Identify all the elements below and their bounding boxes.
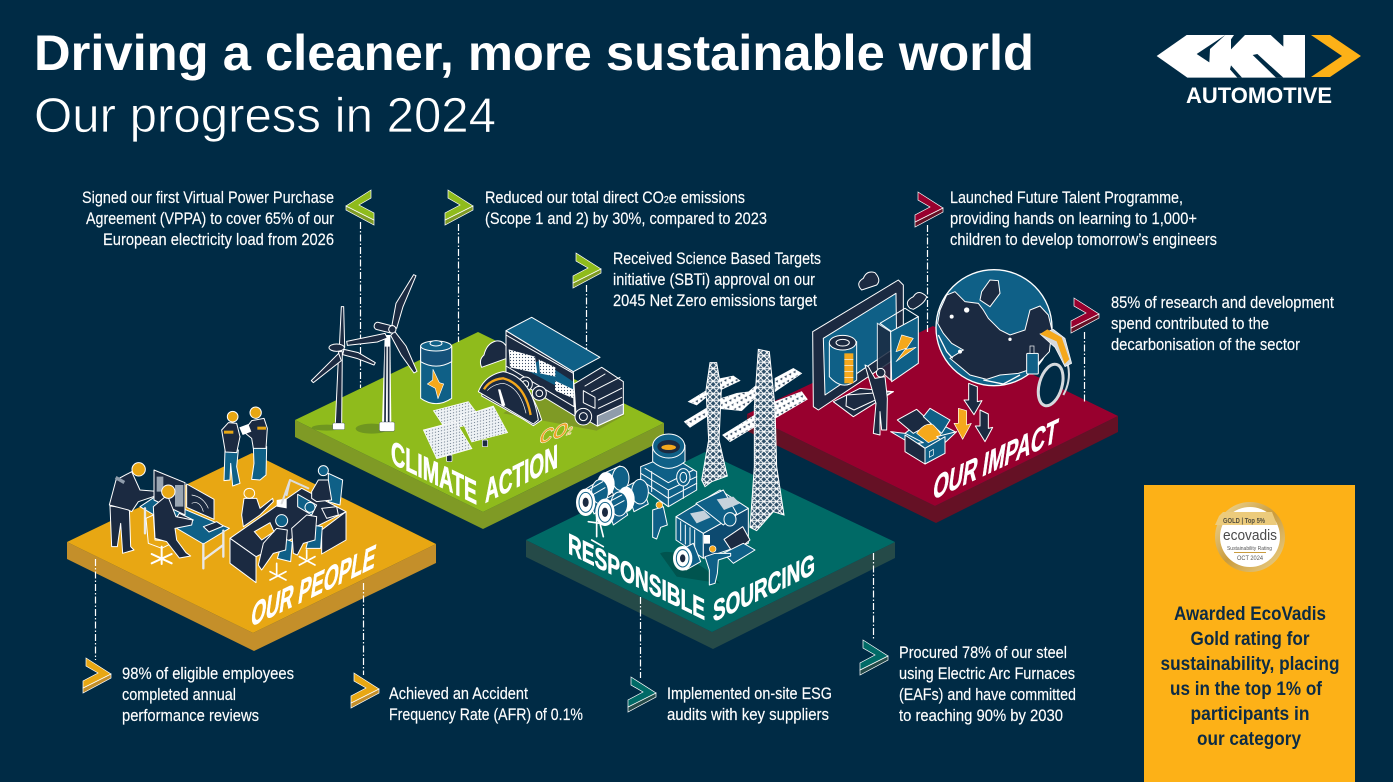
text: renewable power: [82, 189, 334, 249]
icon: open box: [891, 408, 957, 464]
text: future talent: [950, 189, 1217, 249]
text: performance reviews: [122, 665, 294, 725]
chevron: performance reviews: [83, 658, 111, 693]
text: performance reviews: 98% of eligible employees: [122, 665, 294, 683]
icon: pylon rear: [684, 363, 763, 487]
illustration: our people: [109, 407, 346, 583]
text: research and development: decarbonisation of the sector: [1111, 336, 1300, 354]
text: science based targets: Received Science Based Targets: [613, 250, 821, 268]
text: emissions: (Scope 1 and 2) by 30%, compared to 2023: [485, 210, 767, 228]
text: steel: using Electric Arc Furnaces: [899, 665, 1075, 683]
chevron: steel: [860, 640, 888, 675]
icon: person at monitor: [865, 365, 887, 435]
award text: Gold rating for: [1190, 629, 1310, 650]
chevron: future talent: [915, 192, 943, 227]
chevron: renewable power: [346, 190, 374, 225]
text: emissions: [485, 189, 767, 228]
award text: participants in: [1190, 704, 1310, 725]
platform label: our people: OUR PEOPLE: [249, 536, 378, 635]
chevron: accident frequency: [351, 673, 379, 708]
platform label: responsible sourcing: [568, 527, 815, 629]
text: research and development: 85% of research and development: [1111, 294, 1334, 312]
chevron: science based targets: [573, 253, 601, 288]
icon: small wind turbine: [311, 307, 375, 431]
text: ESG audits: audits with key suppliers: [667, 706, 829, 724]
platform label: climate action: CLIMATE: [391, 434, 477, 512]
icon: EcoVadis medal: Sustainability Rating: [1227, 546, 1272, 552]
icon: globe: [936, 270, 1052, 386]
chevron: emissions: [445, 190, 473, 225]
text: emissions: Reduced our total direct CO2e emissions: [485, 189, 745, 207]
text: renewable power: Agreement (VPPA) to cover 65% of our: [86, 210, 334, 228]
icon: energy panel: [877, 308, 918, 382]
icon: two workers in hard hats: [222, 407, 267, 486]
text: performance reviews: performance reviews: [122, 707, 259, 725]
award text: Awarded EcoVadis: [1174, 604, 1326, 625]
panel: EcoVadis award: [1144, 485, 1355, 782]
icon: EcoVadis medal: [1215, 502, 1285, 572]
award text: sustainability, placing: [1160, 654, 1340, 675]
platform label: responsible sourcing: RESPONSIBLE: [568, 527, 705, 627]
text: steel: to reaching 90% by 2030: [899, 707, 1063, 725]
text: accident frequency: Frequency Rate (AFR) of 0.1%: [389, 706, 583, 724]
text: renewable power: Signed our first Virtual Power Purchase: [82, 189, 334, 207]
icon: cloud: [480, 341, 507, 367]
text: steel: [899, 644, 1076, 725]
text: future talent: providing hands on learning to 1,000+: [950, 210, 1197, 228]
icon: standing engineer: [109, 463, 160, 553]
logo: GKN Automotive: [1157, 35, 1361, 108]
icon: press machine: [660, 490, 755, 585]
text: accident frequency: Achieved an Accident: [389, 685, 528, 703]
icon: meeting table: [230, 480, 346, 583]
icon: gauge: [478, 372, 542, 426]
text: science based targets: [613, 250, 821, 310]
icon: EcoVadis medal: ecovadis: [1223, 527, 1277, 544]
platform label: climate action: [391, 434, 558, 512]
icon: computer desk: [140, 470, 229, 568]
icon: seated engineer: [146, 485, 193, 564]
platform: our people: [67, 453, 436, 651]
text: ESG audits: [667, 685, 832, 724]
icon: solar panels: [423, 402, 508, 462]
text: research and development: [1111, 294, 1334, 354]
icon: down arrows: [954, 383, 993, 442]
illustration: our impact: [813, 270, 1072, 464]
connector lines: [96, 222, 1084, 678]
icon: worker by ladle: [653, 502, 667, 539]
icon: CO2: CO2: [537, 416, 576, 449]
icon: battery: [421, 341, 452, 404]
text: future talent: children to develop tomorrow’s engineers: [950, 231, 1217, 249]
text: performance reviews: completed annual: [122, 686, 236, 704]
text: ESG audits: Implemented on-site ESG: [667, 685, 832, 703]
icon: electric truck: [503, 317, 625, 431]
platform label: climate action: ACTION: [485, 438, 558, 511]
platform: our impact: [747, 326, 1118, 523]
platform label: responsible sourcing: SOURCING: [713, 547, 815, 629]
text: accident frequency: [389, 685, 583, 724]
award text: [1160, 604, 1340, 750]
text: future talent: Launched Future Talent Programme,: [950, 189, 1183, 207]
award text: our category: [1197, 729, 1301, 750]
icon: ladle on frame: [641, 434, 697, 507]
title: Driving a cleaner, more sustainable world: [34, 25, 1034, 81]
logo: GKN Automotive: AUTOMOTIVE: [1186, 83, 1332, 108]
award text: us in the top 1% of: [1170, 679, 1323, 700]
text: steel: (EAFs) and have committed: [899, 686, 1076, 704]
platform label: our impact: OUR IMPACT: [931, 411, 1060, 508]
text: renewable power: European electricity load from 2026: [103, 231, 334, 249]
icon: pylon front: [723, 349, 807, 531]
icon: charging plug and cable: [1027, 329, 1072, 409]
icon: EcoVadis medal: OCT 2024: [1237, 555, 1263, 562]
illustration: climate action: [311, 275, 625, 462]
icon: large wind turbine: [347, 275, 417, 434]
illustration: responsible sourcing: [576, 349, 807, 585]
icon: monitor: [813, 280, 903, 417]
platform: climate action: [295, 332, 664, 529]
icon: steel coils: [576, 466, 648, 547]
text: science based targets: 2045 Net Zero emissions target: [613, 292, 817, 310]
subtitle: Our progress in 2024: [34, 89, 496, 143]
icon: clouds: [859, 272, 927, 309]
platform: responsible sourcing: [526, 452, 895, 649]
text: science based targets: initiative (SBTi) approval on our: [613, 271, 815, 289]
chevron: ESG audits: [628, 677, 656, 712]
text: research and development: spend contributed to the: [1111, 315, 1269, 333]
text: steel: Procured 78% of our steel: [899, 644, 1067, 662]
icon: seated colleagues: [242, 466, 343, 580]
icon: EcoVadis medal: GOLD | Top 5%: [1223, 518, 1266, 525]
chevron: research and development: [1071, 298, 1099, 333]
